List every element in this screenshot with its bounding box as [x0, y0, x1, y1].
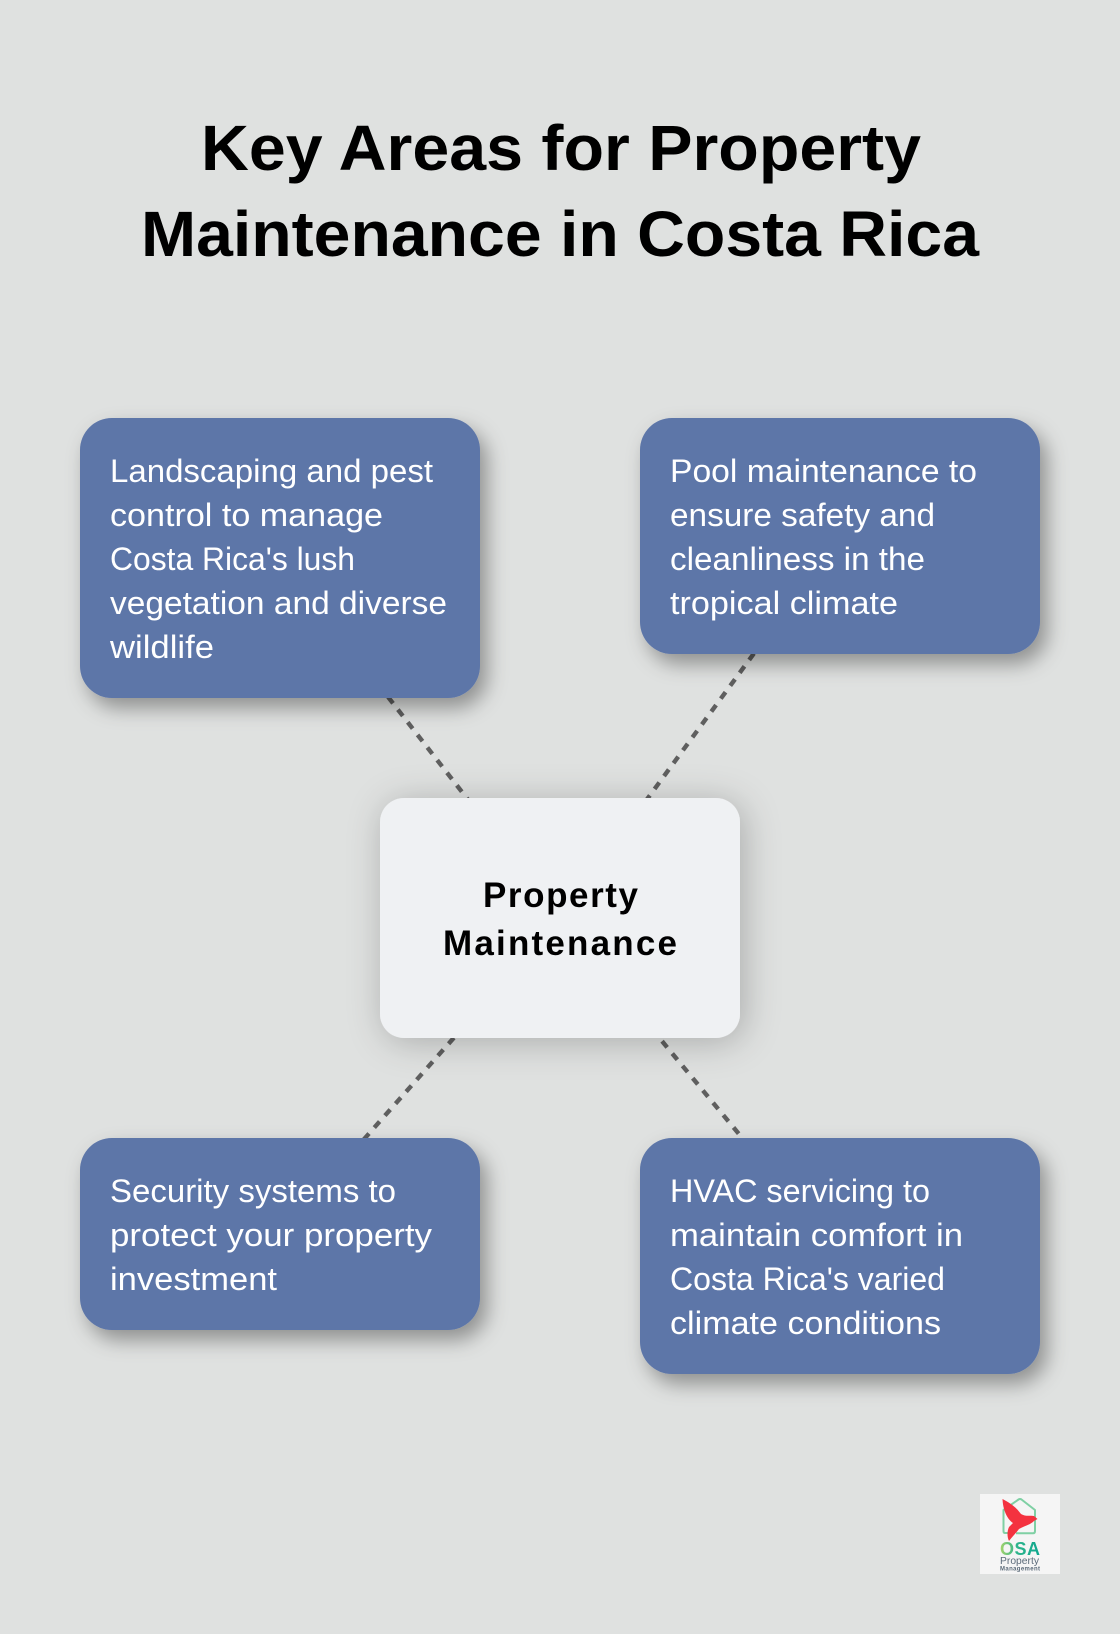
panel: HVAC servicing: climate conditions [670, 1305, 941, 1341]
title: Maintenance in Costa Rica [141, 198, 979, 270]
panel: HVAC servicing: HVAC servicing to [670, 1173, 930, 1209]
icon: red bird [1002, 1499, 1038, 1541]
logo tagline: Property [1000, 1556, 1039, 1567]
panel: landscaping and pest control: Landscaping and pest [110, 453, 433, 489]
panel: HVAC servicing: maintain comfort in [670, 1217, 963, 1253]
panel: landscaping and pest control [80, 418, 480, 698]
panel: central property maintenance [380, 798, 740, 1038]
panel: pool maintenance: ensure safety and [670, 497, 935, 533]
logo tagline small: Management [1000, 1566, 1040, 1572]
panel: security systems: investment [110, 1261, 277, 1297]
panel: pool maintenance: Pool maintenance to [670, 453, 977, 489]
panel: landscaping and pest control: wildlife [109, 629, 214, 665]
panel: security systems: protect your property [110, 1217, 432, 1253]
panel: security systems [80, 1138, 480, 1330]
logo wordmark: OSA [1000, 1539, 1040, 1559]
panel: HVAC servicing [640, 1138, 1040, 1374]
panel: central property maintenance: Property [483, 876, 639, 915]
icon: house outline [1004, 1499, 1035, 1533]
dashed connector lines [280, 536, 840, 1256]
title [141, 112, 979, 270]
panel: pool maintenance: cleanliness in the [670, 541, 925, 577]
panel: landscaping and pest control: Costa Rica's lush [110, 541, 355, 577]
panel: pool maintenance: tropical climate [670, 585, 898, 621]
panel: HVAC servicing: Costa Rica's varied [670, 1261, 945, 1297]
panel: central property maintenance: Maintenance [443, 924, 677, 963]
logo: OSA Property Management [980, 1494, 1060, 1574]
title: Key Areas for Property [201, 112, 921, 184]
panel: pool maintenance [640, 418, 1040, 654]
panel: landscaping and pest control: vegetation and diverse [110, 585, 447, 621]
panel: security systems: Security systems to [110, 1173, 396, 1209]
panel: landscaping and pest control: control to manage [110, 497, 383, 533]
